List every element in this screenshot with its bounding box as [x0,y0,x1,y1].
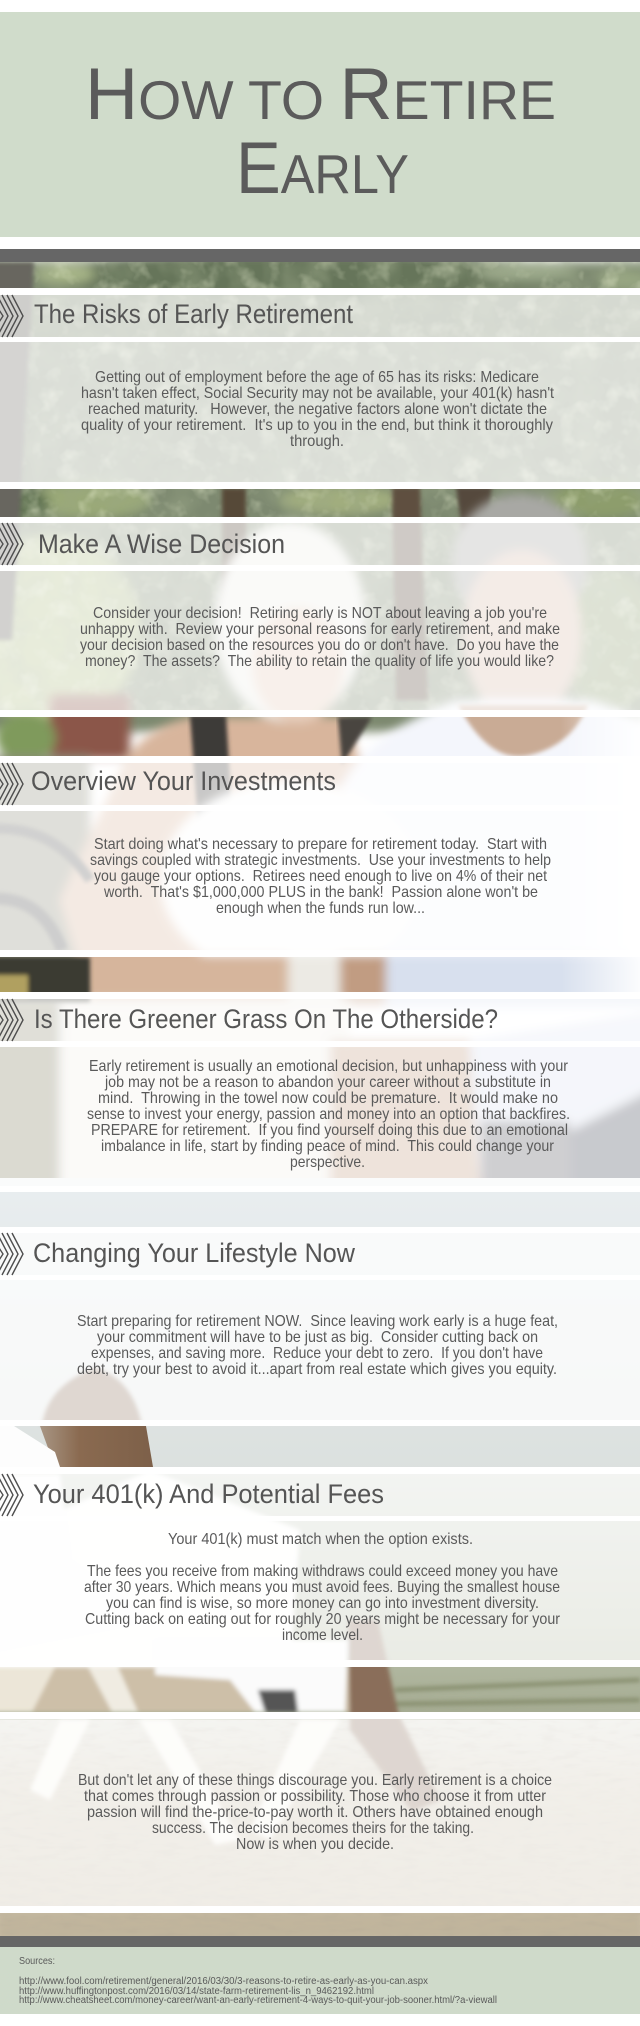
man [452,494,588,630]
heading: The Risks of Early Retirement [34,299,353,329]
bicycle [0,829,90,1002]
body text: through. [290,433,344,450]
title: EARLY [236,128,409,209]
body text: job may not be a reason to abandon your career without a substitute in [104,1074,551,1091]
sources list: Sources: [19,1956,55,1967]
body text: enough when the funds run low... [216,900,425,917]
body text: savings coupled with strategic investments. Use your investments to help [90,852,551,869]
closing text: But don't let any of these things discourage you. Early retirement is a choice [78,1772,552,1789]
translucent panels [0,295,640,1906]
body text: Getting out of employment before the age of 65 has its risks: Medicare [95,369,539,386]
section: Make A Wise Decision [0,523,560,670]
body text [87,1058,570,1171]
closing text: Now is when you decide. [236,1836,394,1853]
icon: chevrons [0,999,23,1041]
icon: chevrons [0,523,23,565]
closing text: passion will find the-price-to-pay worth it. Others have obtained enough [87,1804,543,1821]
sources list: http://www.fool.com/retirement/general/2016/03/30/3-reasons-to-retire-as-early-as-you-can.aspx [19,1976,428,1987]
body text: hasn't taken effect, Social Security may not be available, your 401(k) hasn't [81,385,554,402]
body text: worth. That's $1,000,000 PLUS in the bank! Passion alone won't be [103,884,538,901]
body text: quality of your retirement. It's up to you in the end, but think it thoroughly [81,417,553,434]
body text: Start doing what's necessary to prepare for retirement today. Start with [94,836,547,853]
body text: you gauge your options. Retirees need enough to live on 4% of their net [94,868,547,885]
icon: chevrons [0,295,23,337]
body text: after 30 years. Which means you must avoid fees. Buying the smallest house [84,1579,560,1596]
photo strip: woman's hair and shirt [0,1426,153,1467]
section: Is There Greener Grass On The Otherside? [0,999,570,1171]
body text: debt, try your best to avoid it...apart from real estate which gives you equity. [77,1361,557,1378]
heading: Your 401(k) And Potential Fees [33,1479,384,1509]
body text [80,605,560,670]
sources footer [0,1947,640,2014]
lap [60,1000,350,1190]
title [85,54,556,209]
section: Overview Your Investments [0,763,551,917]
woman [60,717,360,1000]
icon: chevrons [0,1474,23,1516]
body text: money? The assets? The ability to retain the quality of life you would like? [85,653,554,670]
dog and arms [160,780,420,980]
closing text: that comes through passion or possibility. Those who choose it from utter [84,1788,547,1805]
foliage texture [0,262,640,717]
body text [81,369,554,450]
body text: Early retirement is usually an emotional decision, but unhappiness with your [89,1058,569,1075]
body text: mind. Throwing in the towel now could be premature. It would make no [98,1090,558,1107]
body text [77,1313,558,1378]
body text: your decision based on the resources you do or don't have. Do you have the [80,637,559,654]
heading: Overview Your Investments [31,766,336,796]
body text: Cutting back on eating out for roughly 20 years might be necessary for your [85,1611,561,1628]
heading: Make A Wise Decision [38,529,285,559]
heading: Is There Greener Grass On The Otherside? [34,1004,498,1034]
body text [84,1531,561,1644]
hair [42,1368,142,1425]
body text [90,836,551,917]
body text: The fees you receive from making withdraws could exceed money you have [87,1563,558,1580]
body text: reached maturity. However, the negative factors alone won't dictate the [88,401,547,418]
title banner [0,12,640,237]
body text: Your 401(k) must match when the option exists. [168,1531,473,1548]
top dark bar [0,249,640,262]
body text: income level. [282,1627,363,1644]
body text: perspective. [290,1154,365,1171]
body text: Consider your decision! Retiring early is NOT about leaving a job you're [93,605,547,622]
photo: beach [0,1178,640,1937]
body text: your commitment will have to be just as big. Consider cutting back on [97,1329,538,1346]
section: Your 401(k) And Potential Fees [0,1474,561,1644]
bottom dark bar [0,1936,640,1947]
body text: expenses, and saving more. Reduce your debt to zero. If you don't have [91,1345,543,1362]
sources list [19,1956,497,2006]
photo: couple in garden [0,253,640,1190]
closing text: success. The decision becomes theirs for the taking. [152,1820,474,1837]
closing text [78,1772,552,1853]
body text: unhappy with. Review your personal reasons for early retirement, and make [80,621,560,638]
title: HOW TO RETIRE [85,54,556,135]
sources list: http://www.huffingtonpost.com/2016/03/14/state-farm-retirement-lis_n_9462192.html [19,1986,374,1997]
body text: sense to invest your energy, passion and money into an option that backfires. [87,1106,570,1123]
icon: chevrons [0,1233,23,1275]
body text: imbalance in life, start by finding peace of mind. This could change your [101,1138,555,1155]
body text: PREPARE for retirement. If you find yourself doing this due to an emotional [91,1122,568,1139]
icon: chevrons [0,763,23,805]
section: The Risks of Early Retirement [0,295,554,450]
sources list: http://www.cheatsheet.com/money-career/want-an-early-retirement-4-ways-to-quit-your-job-sooner.html/?a-viewall [19,1995,497,2006]
body text: you can find is wise, so more money can go into investment diversity. [106,1595,539,1612]
heading: Changing Your Lifestyle Now [33,1238,355,1268]
section: Changing Your Lifestyle Now [0,1233,558,1378]
body text: Start preparing for retirement NOW. Since leaving work early is a huge feat, [77,1313,558,1330]
